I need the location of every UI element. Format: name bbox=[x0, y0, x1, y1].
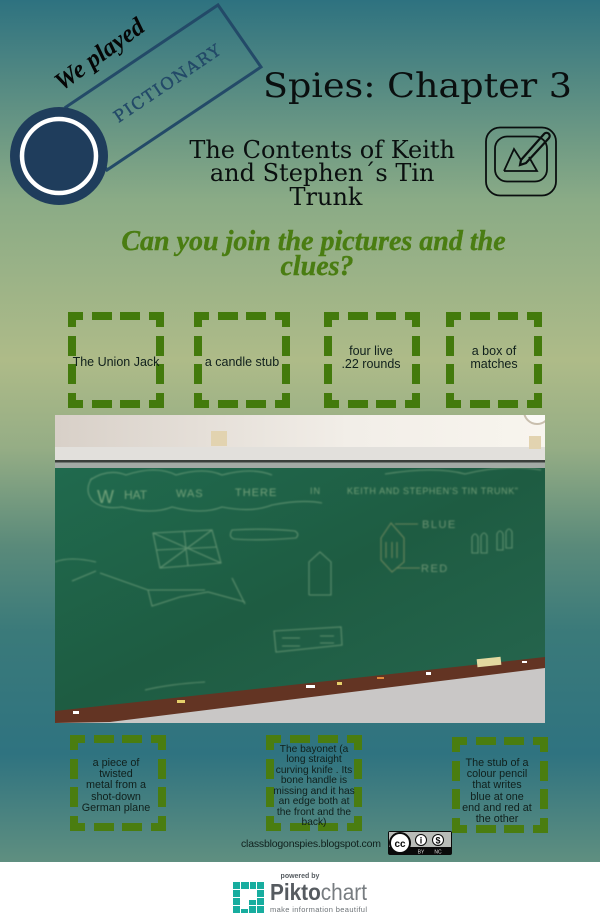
clue box: a box of matches: a box of bbox=[472, 344, 517, 358]
chalk plane bbox=[55, 559, 245, 606]
powered by label: powered by bbox=[281, 873, 320, 880]
clue box: bayonet bbox=[270, 739, 358, 828]
chalk caption: HAT bbox=[124, 488, 148, 502]
board bbox=[55, 468, 545, 712]
circle badge bbox=[10, 107, 108, 205]
clue box: colour pencil: blue at one bbox=[470, 791, 524, 803]
source url: classblogonspies.blogspot.com bbox=[241, 838, 381, 850]
heading: question: clues? bbox=[280, 251, 354, 282]
clue box: a box of matches bbox=[450, 316, 538, 404]
clue box: colour pencil: that writes bbox=[472, 779, 522, 791]
clue box: twisted metal: twisted bbox=[99, 768, 133, 780]
chalk caption bbox=[96, 486, 518, 504]
clue box: bayonet: back) bbox=[302, 817, 326, 828]
icon: creative commons BY-NC badge: $ bbox=[435, 836, 441, 846]
clue box: bayonet: an edge both at bbox=[279, 796, 350, 807]
clue box: twisted metal: shot-down bbox=[91, 791, 141, 803]
chalk labels: RED bbox=[421, 563, 449, 575]
chalk matchbox bbox=[274, 627, 342, 652]
piktochart tagline: make information beautiful bbox=[270, 905, 367, 914]
footer panel bbox=[0, 862, 600, 923]
chalk caption: IN bbox=[310, 486, 321, 496]
pins and clock bbox=[73, 398, 550, 714]
icon: creative commons BY-NC badge: cc bbox=[394, 839, 406, 850]
clue box: colour pencil: The stub of a bbox=[465, 757, 529, 769]
wall bbox=[55, 415, 545, 447]
title: Spies: Chapter 3 bbox=[263, 66, 572, 106]
chalk labels: BLUE bbox=[422, 519, 457, 531]
clue box: a box of matches: matches bbox=[470, 357, 518, 371]
label: PICTIONARY: PICTIONARY bbox=[110, 40, 226, 126]
clue box: twisted metal: German plane bbox=[82, 802, 150, 814]
clue box: The Union Jack bbox=[72, 316, 160, 404]
icon: drawing tablet with pen bbox=[486, 128, 556, 196]
subtitle: Trunk bbox=[290, 183, 363, 211]
clue box: bayonet: missing and it has bbox=[273, 786, 355, 797]
clue box: colour pencil: end and red at bbox=[462, 802, 532, 814]
clue box: twisted metal: a piece of bbox=[93, 757, 140, 769]
clue box: four live .22 rounds: .22 rounds bbox=[341, 357, 401, 371]
photo: chalkboard with pictionary drawings bbox=[55, 398, 550, 723]
chalk candle bbox=[309, 552, 331, 595]
clue box: bayonet: the front and the bbox=[277, 807, 351, 818]
clue box: a candle stub bbox=[198, 316, 286, 404]
chalk caption: WAS bbox=[176, 488, 204, 500]
clue box: The Union Jack: The Union Jack bbox=[73, 355, 160, 369]
icon: piktochart logo bbox=[233, 882, 264, 913]
chalk labels bbox=[421, 519, 457, 575]
icon: creative commons BY-NC badge: NC bbox=[434, 850, 442, 856]
clue box: colour pencil: the other bbox=[476, 813, 519, 825]
chalk caption: KEITH AND STEPHEN'S TIN TRUNK" bbox=[347, 486, 519, 496]
subtitle: and Stephen´s Tin bbox=[210, 159, 434, 187]
chalk caption: W bbox=[97, 487, 114, 507]
chalk candle stub bbox=[230, 529, 298, 540]
clue box: bayonet: The bayonet (a bbox=[280, 744, 349, 755]
ribbon bbox=[66, 5, 261, 170]
heading: question: Can you join the pictures and the bbox=[121, 226, 506, 257]
clue box: bayonet: curving knife . Its bbox=[276, 765, 352, 776]
clue box: twisted metal bbox=[74, 739, 162, 827]
chalk stroke bbox=[145, 682, 205, 690]
icon: creative commons BY-NC badge: i bbox=[420, 836, 422, 846]
clue box: bayonet: long straight bbox=[286, 754, 342, 765]
chalk bullets bbox=[472, 529, 512, 553]
chalk pencil bbox=[381, 523, 420, 572]
chalk drawings bbox=[55, 468, 541, 690]
clue box: a candle stub: a candle stub bbox=[205, 355, 279, 369]
clue box: four live .22 rounds bbox=[328, 316, 416, 404]
screen rail bbox=[55, 447, 545, 468]
banner: We played Pictionary bbox=[10, 5, 261, 205]
wall lower bbox=[56, 668, 545, 723]
icon: creative commons BY-NC badge: BY bbox=[418, 850, 425, 856]
chalk caption: THERE bbox=[235, 487, 277, 499]
chalk cloud bbox=[88, 468, 541, 511]
tray bbox=[55, 657, 545, 723]
clue box: colour pencil bbox=[456, 741, 544, 829]
label: We played: We played bbox=[50, 13, 150, 96]
clue box: twisted metal: metal from a bbox=[86, 779, 146, 791]
clue box: colour pencil: colour pencil bbox=[467, 768, 527, 780]
subtitle: The Contents of Keith bbox=[189, 136, 455, 164]
piktochart wordmark: Piktochart bbox=[270, 879, 368, 905]
icon: creative commons BY-NC badge bbox=[388, 831, 452, 856]
clue box: four live .22 rounds: four live bbox=[349, 344, 393, 358]
chalk flag bbox=[153, 530, 221, 568]
clue box: bayonet: bone handle is bbox=[281, 775, 347, 786]
